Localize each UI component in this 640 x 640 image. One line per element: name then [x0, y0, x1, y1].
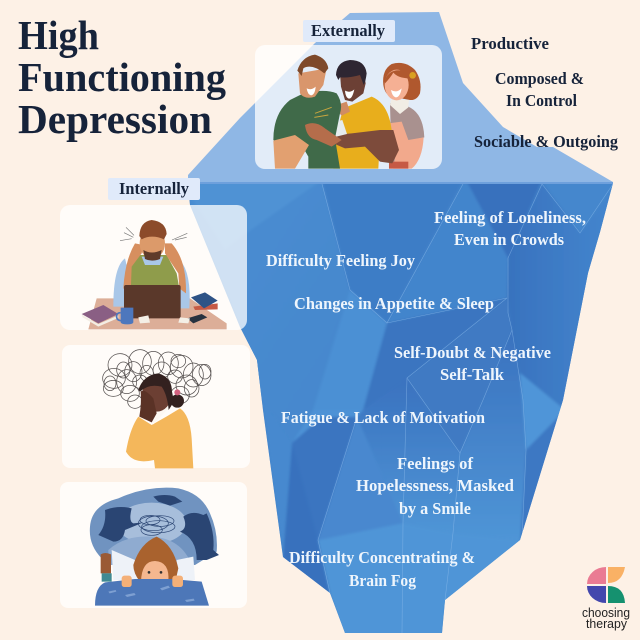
iceberg facets: [180, 180, 620, 640]
iceberg: below water: [180, 180, 620, 640]
iceberg text: [266, 208, 586, 590]
iceberg text: Feelings of: [397, 454, 473, 473]
illustration: three friends: [273, 55, 424, 169]
iceberg text: by a Smile: [399, 499, 471, 518]
panel: externally: [255, 45, 442, 169]
illustration: man at desk: [82, 220, 227, 329]
externally traits: Composed &: [495, 69, 584, 88]
iceberg text: Difficulty Feeling Joy: [266, 251, 416, 270]
panel: child hiding in bed: [60, 482, 247, 608]
logo: choosing therapy: choosing: [582, 605, 630, 620]
label: Internally: [108, 178, 200, 200]
title: Functioning: [18, 54, 226, 100]
iceberg text: Fatigue & Lack of Motivation: [281, 408, 485, 427]
logo: choosing therapy: therapy: [586, 616, 627, 631]
woman: [383, 63, 424, 169]
iceberg text: Brain Fog: [349, 571, 417, 590]
iceberg text: Hopelessness, Masked: [356, 476, 514, 495]
man in yellow shirt: [328, 60, 399, 169]
illustration: woman and tangled thoughts: [103, 350, 211, 468]
panel: woman with tangled thoughts: [62, 345, 250, 468]
title: Depression: [18, 96, 212, 142]
label: Externally: Externally: [311, 21, 385, 40]
illustration: child under blanket with nightmares: [90, 488, 219, 606]
label: Internally: Internally: [119, 179, 189, 198]
waterline: [188, 182, 613, 184]
iceberg facet lines: [318, 184, 613, 633]
iceberg text: Changes in Appetite & Sleep: [294, 294, 494, 313]
externally traits: Productive: [471, 34, 549, 53]
externally traits: [471, 34, 619, 151]
logo: choosing therapy: [582, 567, 630, 631]
externally traits: In Control: [506, 91, 577, 110]
iceberg: above water: [188, 12, 613, 184]
woman: [126, 408, 193, 468]
iceberg text: Difficulty Concentrating &: [289, 548, 475, 567]
iceberg text: Feeling of Loneliness,: [434, 208, 586, 227]
tangled thought cloud: [103, 350, 211, 408]
man in green shirt: [273, 55, 342, 169]
iceberg text: Self-Doubt & Negative: [394, 343, 551, 362]
iceberg text: Self-Talk: [440, 365, 505, 384]
title: High: [18, 12, 99, 58]
panel: internally, stressed man at laptop: [60, 205, 247, 330]
iceberg text: Even in Crowds: [454, 230, 565, 249]
title: [18, 12, 226, 142]
externally traits: Sociable & Outgoing: [474, 132, 619, 151]
